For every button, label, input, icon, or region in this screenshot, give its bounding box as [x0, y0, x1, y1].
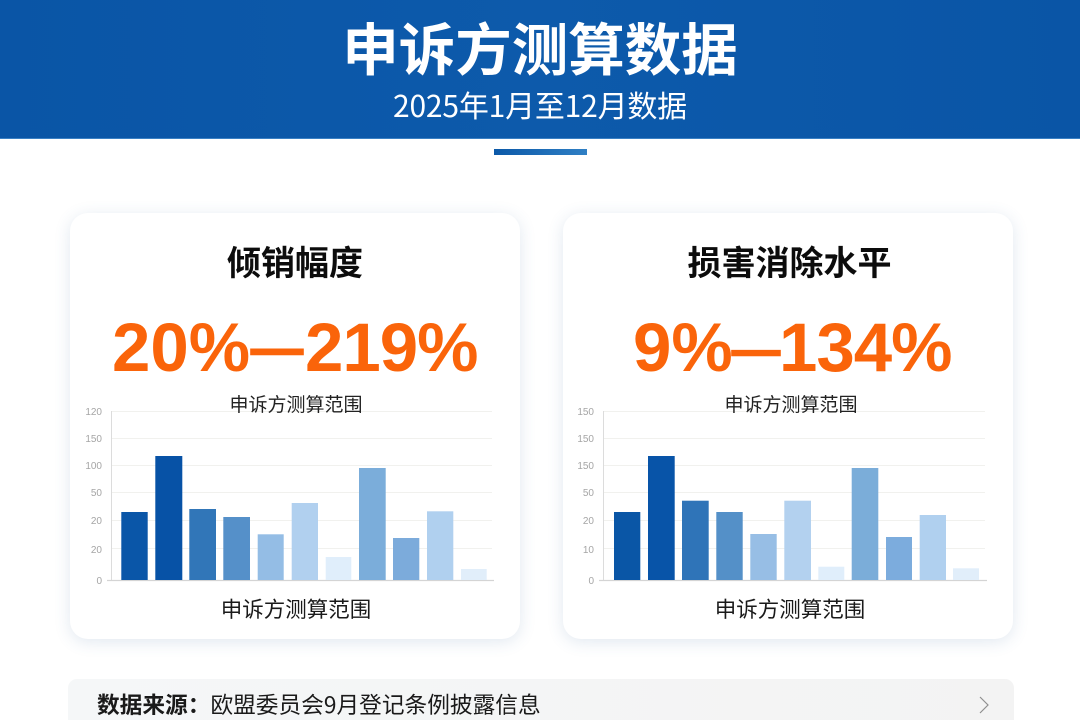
range value right: [633, 309, 951, 386]
bar chart left: [85, 407, 494, 587]
range value left: —: [251, 320, 303, 378]
range value right: 9%: [633, 309, 733, 386]
bar chart right: 150: [577, 461, 594, 472]
bar chart left: 20: [91, 545, 102, 556]
panel heading: 损害消除水平: [688, 236, 892, 285]
icon: chevron: [980, 696, 989, 714]
bar chart right: 20: [583, 516, 594, 527]
title: 申诉方测算数据: [342, 5, 738, 87]
bar chart right: [577, 407, 987, 587]
bar chart left: 120: [85, 407, 102, 418]
bar chart left: 100: [85, 461, 102, 472]
source bar: [68, 679, 1014, 720]
chart caption left: 申诉方测算范围: [229, 394, 363, 416]
panel: 损害消除水平: [563, 213, 1013, 639]
source text: 数据来源：欧盟委员会9月登记条例披露信息: [97, 687, 541, 720]
bar chart left: 0: [96, 576, 102, 587]
panel heading: 倾销幅度: [227, 236, 363, 285]
panel: 倾销幅度: [70, 213, 520, 639]
bar chart left: 20: [91, 516, 102, 527]
axis caption right: 申诉方测算范围: [715, 598, 865, 622]
bar chart right: 0: [588, 576, 594, 587]
bar chart right: 50: [583, 488, 594, 499]
subtitle: 2025年1月至12月数据: [393, 82, 687, 126]
range value left: 20%: [112, 309, 250, 386]
range value left: [112, 309, 477, 386]
range value right: —: [732, 324, 780, 377]
chart caption right: 申诉方测算范围: [724, 394, 858, 416]
bar chart left: 150: [85, 434, 102, 445]
bar chart right: 150: [577, 434, 594, 445]
axis caption left: 申诉方测算范围: [221, 598, 371, 622]
bar chart right: 10: [583, 545, 594, 556]
range value right: 134%: [779, 309, 951, 386]
bar chart right: 150: [577, 407, 594, 418]
range value left: 219%: [305, 309, 477, 386]
bar chart left: 50: [91, 488, 102, 499]
accent divider: [494, 149, 587, 155]
header band: [0, 0, 1080, 139]
